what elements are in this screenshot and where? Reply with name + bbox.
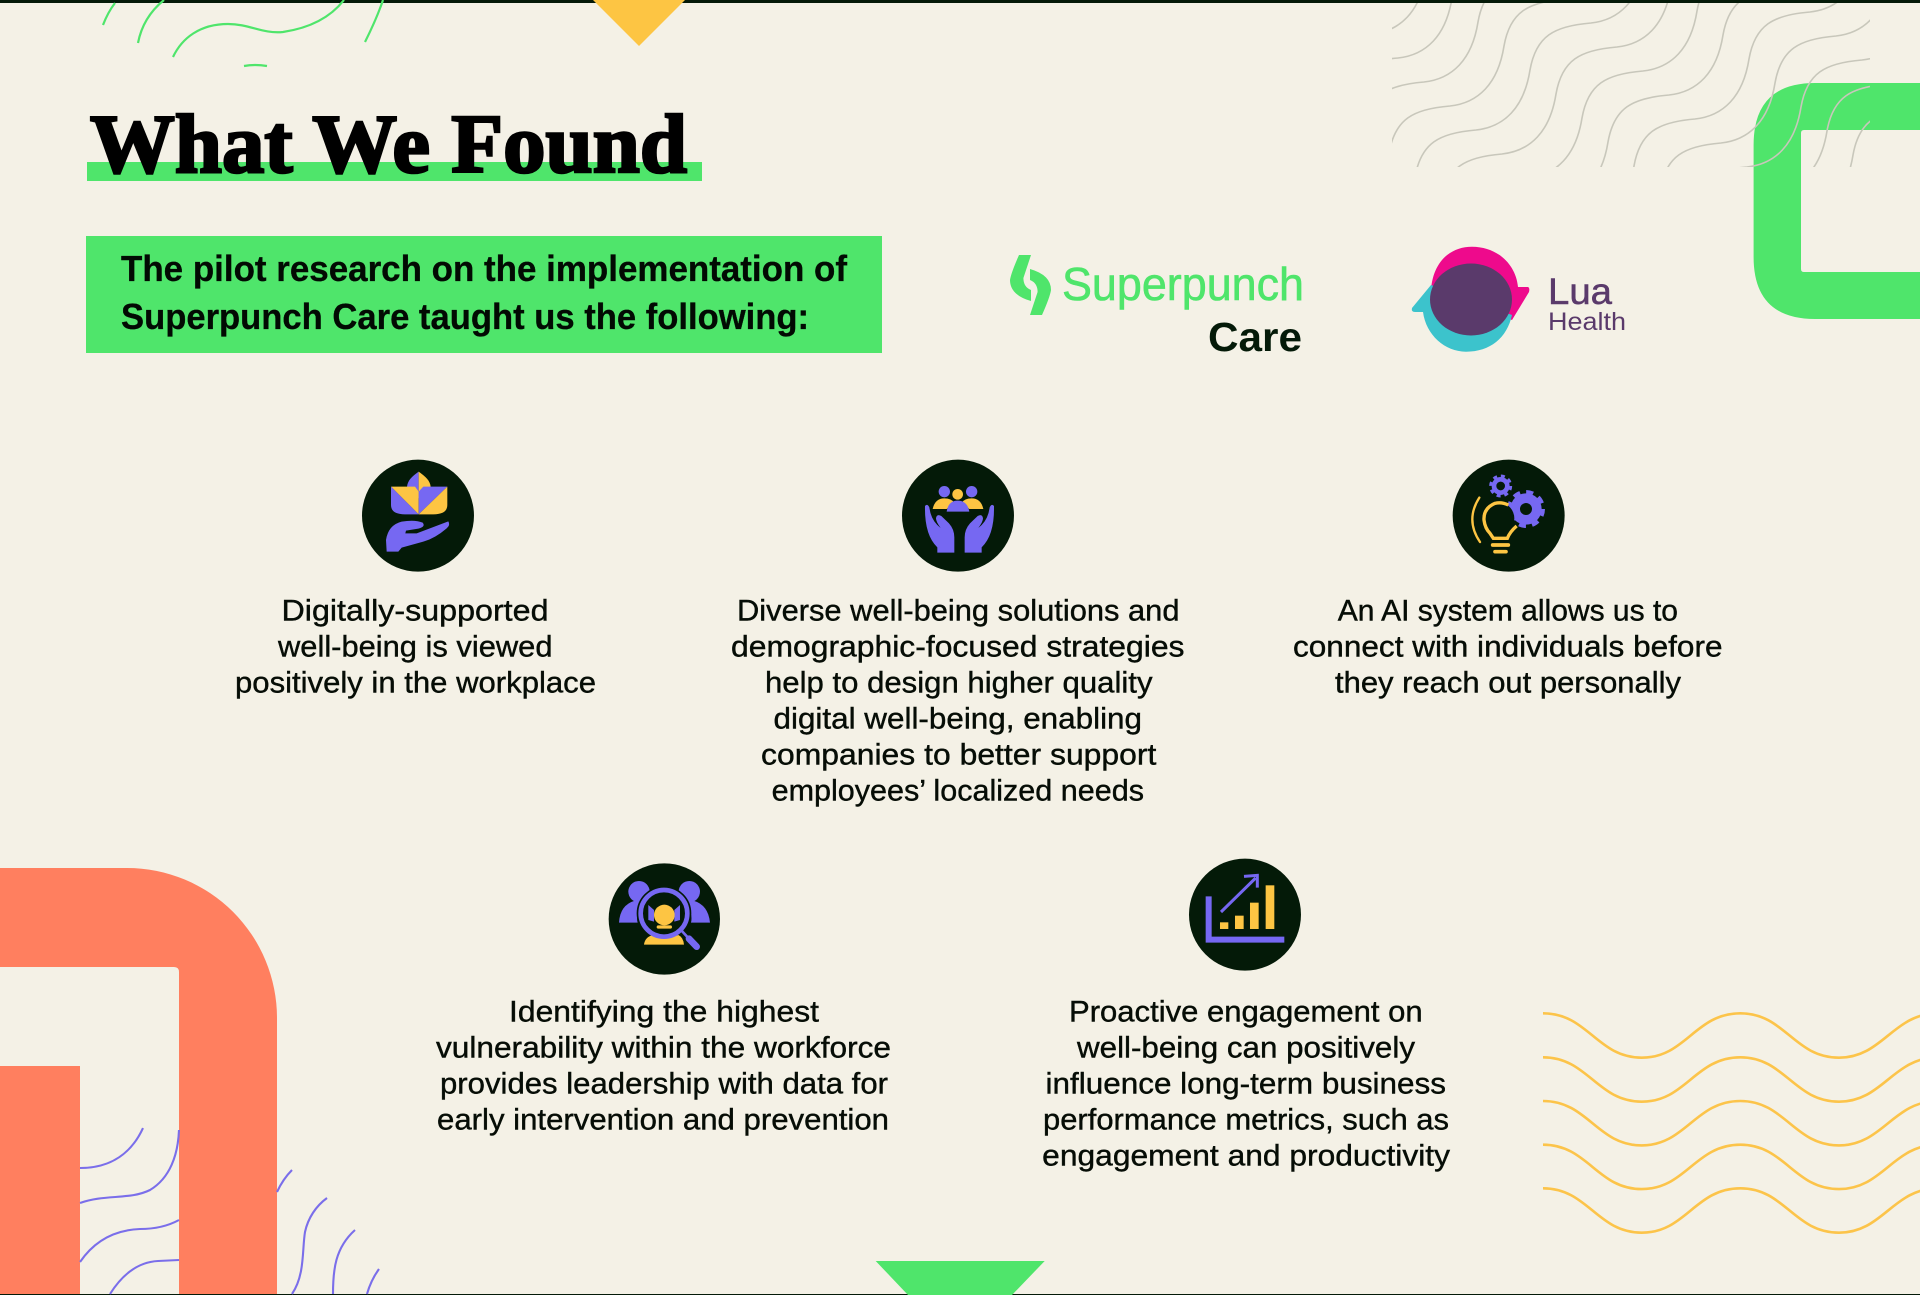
finding 5 [1042, 859, 1450, 1172]
purple wave lines [80, 1128, 379, 1294]
icon: magnifier over people [609, 863, 720, 975]
text: finding 5: performance metrics, such as [1043, 1103, 1449, 1136]
intro box: The pilot research on the implementation of [121, 248, 848, 289]
text: finding 2: digital well-being, enabling [774, 703, 1142, 736]
text: finding 5 [1042, 995, 1450, 1172]
text: finding 2: Diverse well-being solutions and [737, 595, 1180, 628]
text: finding 4: early intervention and prevention [437, 1103, 889, 1136]
text: finding 4: Identifying the highest [509, 995, 820, 1028]
icon: hands holding people [902, 460, 1014, 572]
yellow wave lines [1543, 1013, 1920, 1233]
text: finding 1 [235, 595, 596, 700]
icon: growth chart [1189, 859, 1301, 971]
text: finding 4: vulnerability within the workforce [436, 1031, 891, 1064]
text: finding 5: Proactive engagement on [1069, 995, 1423, 1028]
green bracket shape [1754, 83, 1920, 319]
logo: Lua Health [1412, 247, 1626, 352]
orange bracket shape [0, 868, 277, 1294]
green wave lines [103, 0, 383, 66]
text: finding 3: connect with individuals before [1293, 631, 1722, 664]
text: finding 3: they reach out personally [1335, 667, 1681, 700]
grey wave lines [1392, 3, 1870, 167]
finding 2 [731, 460, 1184, 808]
text: finding 2: help to design higher quality [765, 667, 1152, 700]
icon: light bulb and gears [1453, 460, 1565, 572]
title underline [87, 162, 702, 181]
text: finding 5: engagement and productivity [1042, 1139, 1450, 1172]
text: finding 3 [1293, 595, 1722, 700]
logo: Superpunch Care [1010, 255, 1304, 360]
Care wordmark: Care [1208, 314, 1302, 360]
icon: Superpunch bolt [1010, 255, 1051, 315]
Lua wordmark: Lua [1548, 271, 1612, 312]
icon: Lua heads [1412, 247, 1529, 352]
text: finding 5: influence long-term business [1046, 1067, 1446, 1100]
finding 3 [1293, 460, 1722, 700]
text: finding 4: provides leadership with data for [440, 1067, 888, 1100]
Health wordmark: Health [1548, 308, 1626, 336]
finding 1 [235, 460, 596, 700]
yellow triangle [593, 0, 685, 46]
finding 4 [436, 863, 891, 1136]
Superpunch wordmark: Superpunch [1062, 258, 1304, 310]
bottom border [0, 1294, 1920, 1295]
text: finding 5: well-being can positively [1076, 1031, 1415, 1064]
text: finding 2: demographic-focused strategies [731, 631, 1184, 664]
text: finding 1: positively in the workplace [235, 667, 596, 700]
text: finding 2 [731, 595, 1184, 808]
text: finding 1: well-being is viewed [277, 631, 552, 664]
green triangle [876, 1261, 1045, 1295]
top border [0, 0, 1920, 3]
text: finding 2: employees’ localized needs [772, 775, 1144, 808]
icon: hand holding flower [362, 460, 474, 572]
title: What We Found [90, 98, 687, 191]
intro box [86, 236, 882, 353]
text: finding 2: companies to better support [761, 739, 1157, 772]
intro box: Superpunch Care taught us the following: [121, 296, 809, 337]
text: finding 4 [436, 995, 891, 1136]
text: finding 3: An AI system allows us to [1338, 595, 1678, 628]
text: finding 1: Digitally-supported [282, 595, 548, 628]
